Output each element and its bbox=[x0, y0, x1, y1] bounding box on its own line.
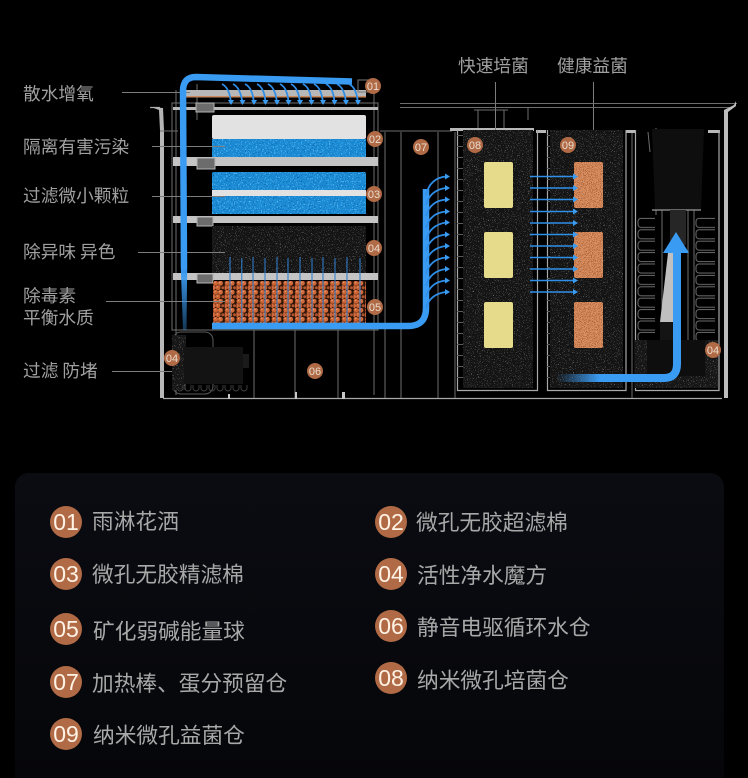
panel: legend bbox=[15, 473, 724, 778]
diagram number badges bbox=[164, 78, 721, 379]
label: 除毒素 平衡水质: 除毒素 bbox=[23, 282, 76, 308]
badge 01 bbox=[365, 78, 381, 94]
orange block bbox=[574, 162, 603, 208]
legend 07: 加热棒、蛋分预留仓 bbox=[92, 667, 288, 698]
horizontal flow arrows bbox=[530, 174, 578, 295]
leader lines bbox=[106, 82, 594, 372]
badge 04 right: 04 bbox=[707, 345, 719, 357]
badge 05 bbox=[367, 299, 383, 315]
label: 除异味 异色: 除异味 异色 bbox=[23, 238, 116, 264]
legend 04: 04 bbox=[378, 561, 404, 587]
big blue upward arrow bbox=[558, 232, 689, 378]
badge 03: 03 bbox=[368, 189, 380, 201]
orange block bbox=[574, 232, 603, 278]
badge 04 left bbox=[164, 350, 180, 366]
thin blue drip lines through media bbox=[230, 257, 360, 323]
legend 07: 07 bbox=[53, 669, 79, 695]
tank outline bbox=[150, 84, 737, 398]
legend 03: 微孔无胶精滤棉 bbox=[92, 558, 244, 589]
legend 05: 矿化弱碱能量球 bbox=[93, 615, 245, 646]
badge 09 bbox=[560, 137, 576, 153]
badge 08: 08 bbox=[469, 140, 481, 152]
badge 05: 05 bbox=[369, 302, 381, 314]
skimmer black box bbox=[648, 129, 704, 245]
return pipe bbox=[660, 253, 680, 322]
legend 06: 静音电驱循环水仓 bbox=[417, 611, 591, 642]
legend 09: 纳米微孔益菌仓 bbox=[93, 719, 245, 750]
foam 02: white and blue sponge bbox=[212, 115, 366, 157]
badge 08 bbox=[467, 137, 483, 153]
black foam bottom right bbox=[635, 322, 718, 388]
legend 03: 03 bbox=[53, 561, 79, 587]
legend 02: 02 bbox=[378, 509, 404, 535]
yellow block bbox=[484, 302, 513, 348]
bacteria chamber 08 foam with yellow blocks bbox=[463, 130, 533, 388]
label: 除毒素 平衡水质: 平衡水质 bbox=[23, 304, 94, 330]
fan arrows into bacteria chamber bbox=[426, 174, 450, 308]
tray bbox=[173, 273, 378, 283]
legend 06: 06 bbox=[378, 613, 404, 639]
badge 02 bbox=[367, 131, 383, 147]
badge 06: 06 bbox=[309, 366, 321, 378]
left callout labels bbox=[23, 80, 129, 383]
legend 05: 05 bbox=[53, 616, 79, 642]
foam 04: black activated carbon bbox=[212, 226, 366, 273]
tray bbox=[173, 216, 378, 226]
badge 04: 04 bbox=[368, 243, 380, 255]
blue water flow: bottom to heater chamber bbox=[212, 189, 426, 326]
legend 01 bbox=[50, 505, 179, 538]
spray arrows bbox=[222, 84, 361, 105]
return chamber ribs bbox=[587, 128, 745, 340]
foam 03: blue white blue sponge bbox=[212, 172, 366, 214]
legend 08: 08 bbox=[378, 665, 404, 691]
badge 04 left: 04 bbox=[166, 353, 178, 365]
bacteria chamber 09 foam with orange blocks bbox=[550, 130, 623, 388]
legend 01: 雨淋花洒 bbox=[92, 505, 179, 536]
label: 散水增氧: 散水增氧 bbox=[23, 80, 94, 106]
top callout labels bbox=[458, 52, 628, 78]
badge 04 bbox=[366, 240, 382, 256]
legend 09: 09 bbox=[53, 721, 79, 747]
blue water flow: riser and top distributor bbox=[183, 77, 352, 268]
legend 04: 活性净水魔方 bbox=[417, 559, 547, 590]
badge 09: 09 bbox=[562, 140, 574, 152]
badge 02: 02 bbox=[369, 134, 381, 146]
badge 03 bbox=[366, 186, 382, 202]
badge 04 right bbox=[705, 342, 721, 358]
label: 隔离有害污染: 隔离有害污染 bbox=[23, 133, 129, 159]
legend 01: 01 bbox=[53, 509, 79, 535]
fading lower riser bbox=[181, 268, 187, 330]
label: 健康益菌: 健康益菌 bbox=[557, 52, 628, 78]
tray bbox=[173, 157, 378, 169]
badge 07 bbox=[413, 139, 429, 155]
sump floor details bbox=[228, 392, 345, 399]
badge 06 bbox=[307, 363, 323, 379]
legend 08: 纳米微孔培菌仓 bbox=[417, 664, 569, 695]
pump in left sump bbox=[172, 332, 249, 395]
badge 07: 07 bbox=[415, 142, 427, 154]
yellow block bbox=[484, 162, 513, 208]
orange block bbox=[574, 302, 603, 348]
label: 过滤 防堵: 过滤 防堵 bbox=[23, 357, 98, 383]
badge 01: 01 bbox=[367, 81, 379, 93]
top spray tray bbox=[173, 80, 378, 112]
legend 02: 微孔无胶超滤棉 bbox=[416, 506, 568, 537]
label: 过滤微小颗粒: 过滤微小颗粒 bbox=[23, 182, 129, 208]
label: 快速培菌: 快速培菌 bbox=[458, 52, 529, 78]
label: 除毒素 平衡水质 bbox=[23, 282, 94, 330]
yellow block bbox=[484, 232, 513, 278]
mineral balls 05 bbox=[213, 281, 366, 323]
